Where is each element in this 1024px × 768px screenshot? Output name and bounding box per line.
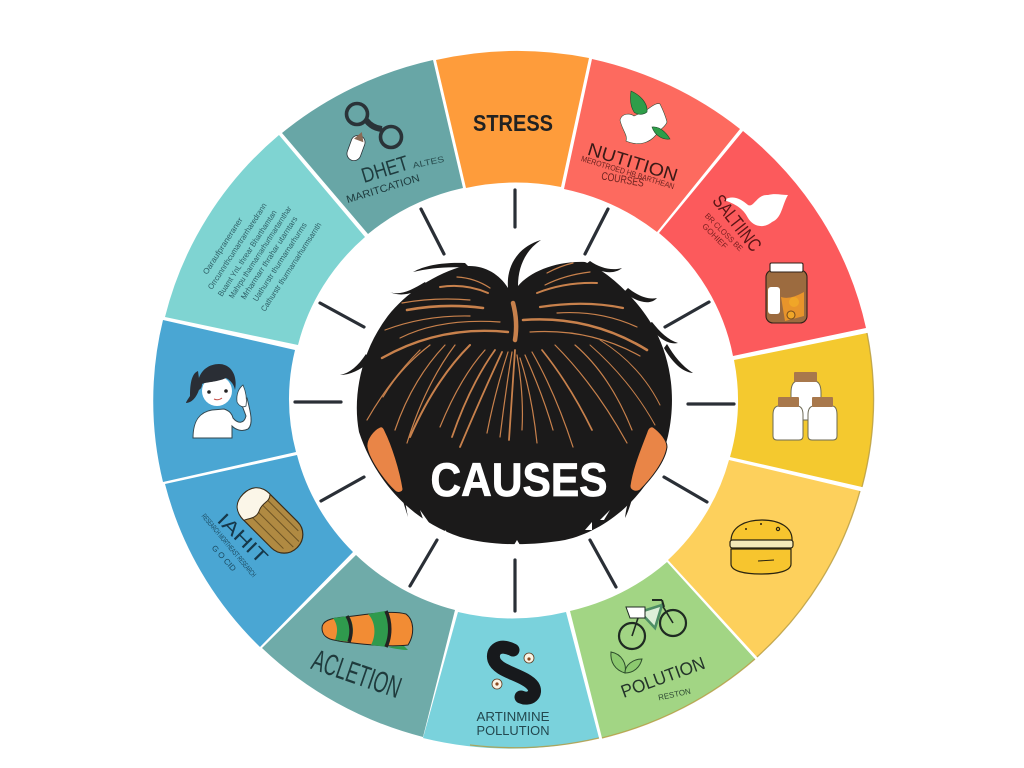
label: salting: SALTIINC	[708, 191, 765, 256]
segment: acletion	[262, 555, 455, 737]
orange hair strands	[367, 263, 660, 447]
white slivers along lower hair edge	[420, 510, 610, 545]
label: nutrition: NUTITION	[585, 139, 680, 185]
paragraph block on light teal segment: Uathurstr thurmarnarhurms	[251, 221, 309, 303]
burger icon	[730, 520, 793, 574]
hair mass	[357, 240, 672, 544]
label: pollution: POLLUTION	[476, 724, 550, 738]
label: iahit: IAHIT	[213, 510, 272, 569]
gold rim edge	[470, 333, 874, 748]
label: artinmine: ARTINMINE	[476, 710, 550, 724]
small text: nutrition: MEROTROED HB BARTHEAN	[580, 154, 676, 191]
segment: salting	[659, 131, 866, 356]
bottles icon	[773, 372, 837, 440]
paragraph block on light teal segment: Cathurstr thurmarnarhurmsarnth	[259, 221, 323, 313]
small text: iahit: RESEARCH MORTHEAST RESEARCH	[200, 512, 258, 579]
paragraph block on light teal segment: Orrcunnrthcumartrarrharedrann	[206, 201, 269, 291]
icon: wooden log	[230, 481, 310, 561]
segment: burger	[668, 460, 860, 657]
small text: maritcation: MARITCATION	[345, 172, 421, 206]
heading: causes: CAUSES	[430, 453, 608, 506]
ear left	[367, 427, 403, 492]
artinmine group	[476, 647, 550, 738]
label: stress: STRESS	[473, 110, 553, 136]
icon: white pill	[345, 130, 368, 163]
diet group	[345, 104, 445, 206]
segment: paragraph	[165, 135, 365, 345]
segment: girl	[153, 320, 296, 482]
paragraph block on light teal segment	[201, 201, 323, 313]
icon: striped carrot	[322, 611, 413, 650]
segment: bottles	[730, 333, 874, 487]
icon: white swoosh	[724, 194, 788, 226]
wisps	[340, 261, 693, 518]
segment: nutrition	[564, 59, 740, 232]
icon: leaves	[611, 652, 642, 673]
paragraph block on light teal segment: Oaraufpraneraner	[201, 216, 245, 276]
segment: stress	[436, 51, 589, 188]
small text: salting 2: GOHIEF	[700, 222, 729, 251]
icon: flower and leaves	[620, 91, 670, 144]
central head with hair	[340, 240, 693, 545]
paragraph block on light teal segment: Mrharmarr thrahar utarntars	[239, 215, 300, 301]
ear right	[630, 427, 667, 491]
small text: salting: BR CLOSS BE	[703, 211, 745, 253]
iahit group	[200, 481, 310, 579]
segment: artinmine	[423, 612, 599, 749]
small text: altes: ALTES	[412, 154, 445, 170]
small text: courses: COURSES	[600, 170, 645, 190]
label: polution: POLUTION	[618, 653, 708, 702]
segment: iahit	[165, 455, 353, 647]
icon: linked rings	[346, 104, 402, 148]
small text: iahit 2: G O CID	[210, 543, 238, 573]
paragraph block on light teal segment: Mahrpu tharmarnarhurtmartarnthar	[227, 204, 294, 300]
acletion group	[308, 611, 413, 705]
paragraph block on light teal segment: Buamt YnL threar Bharthamtan	[216, 208, 279, 298]
icon: jar	[766, 263, 807, 323]
icon: bicycle	[619, 600, 686, 649]
pollution group	[611, 600, 708, 702]
spokes	[295, 190, 734, 611]
icon: girl touching face	[186, 364, 251, 438]
outer wheel segments	[153, 51, 874, 749]
icon: black s shape	[493, 647, 535, 698]
label: diet: DHET	[359, 152, 412, 188]
segment: diet	[282, 60, 463, 234]
salting group	[700, 191, 807, 323]
nutrition group	[580, 91, 680, 191]
small text: reston: RESTON	[657, 687, 692, 702]
segment: pollution	[570, 562, 755, 738]
label: acletion: ACLETION	[308, 644, 405, 705]
icon: round seeds	[492, 653, 534, 689]
